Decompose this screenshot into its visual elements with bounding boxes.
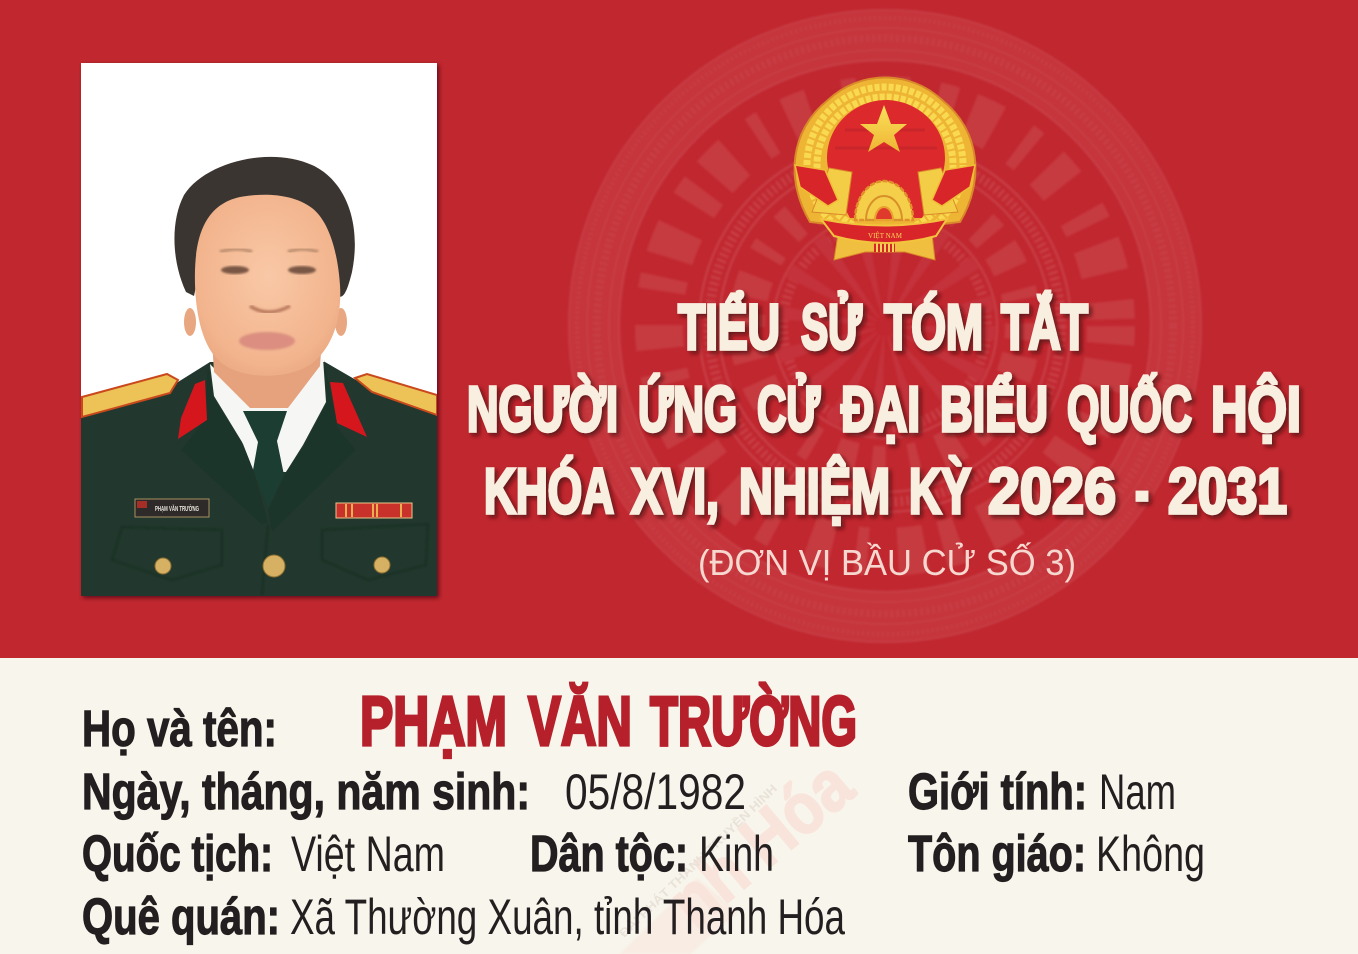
hair [174,157,355,297]
ears [184,308,196,336]
faint station watermark: nh Hóa [654,744,868,942]
head [174,157,355,376]
title line 1: TÓM [884,291,983,363]
candidate name: TRƯỜNG [650,682,857,760]
bronze drum watermark [569,10,1201,642]
field: full name [82,682,857,760]
field: hometown: Quê quán: [82,888,280,945]
title line 1: TIỂU [678,290,780,363]
right red ribbon [932,165,975,206]
title line 2: NGƯỜI [467,373,618,445]
title line 3: NHIỆM [739,454,890,527]
name tag: PHẠM VĂN TRƯỜNG [155,504,199,513]
inner red field [827,100,945,218]
national emblem [795,78,975,260]
pockets [112,524,428,596]
right collar tab [330,382,367,437]
right epaulette [355,374,437,415]
title line 3: KỲ [909,455,971,527]
field: gender: Nam [1099,764,1176,820]
left sheaf [812,168,852,215]
cogwheel [855,181,913,220]
white shirt collar [210,358,326,472]
neck [212,354,321,408]
gold buttons [155,555,390,577]
title [467,290,1301,527]
title line 1: SỬ [801,290,863,363]
left red ribbon [795,165,838,206]
left lapel [240,440,254,472]
face [195,195,340,376]
nose [250,306,290,312]
left epaulette [82,374,178,417]
name tag [135,499,209,517]
eyes [221,266,249,274]
necktie [243,411,287,472]
title line 2: QUỐC [1067,373,1192,445]
mouth [239,332,295,350]
field: date of birth: Ngày, tháng, năm sinh: [82,763,530,820]
title line 3: - [1135,455,1149,527]
faint station watermark [616,744,868,954]
field: hometown: Xã Thường Xuân, tỉnh Thanh Hóa [290,889,845,945]
ribbon bar [336,503,412,518]
portrait photo [81,63,437,596]
grain texture [807,87,963,243]
field: nationality: Quốc tịch: [82,825,273,882]
red header background [0,0,1358,658]
candidate name: VĂN [528,682,632,760]
uniform jacket [81,362,437,596]
title line 2: ĐẠI [841,373,920,445]
title line 3: 2031 [1168,455,1287,527]
subtitle: (ĐƠN VỊ BẦU CỬ SỐ 3) [698,541,1076,583]
gold star [860,105,907,152]
eyebrows [220,249,318,252]
field: religion: Không [1096,826,1205,882]
title line 3: KHÓA [484,455,614,527]
candidate name: PHẠM [360,682,507,760]
field: hometown [82,888,845,945]
lower red field detail [835,130,937,148]
title line 3 [484,454,1287,527]
wheat horseshoe [795,78,975,226]
field: ethnicity: Kinh [699,826,774,882]
title line 2: BIỂU [940,372,1048,445]
title line 3: 2026 [988,455,1116,527]
candidate name [360,682,857,760]
bottom scroll [821,219,947,243]
title line 1: TẮT [1001,290,1088,363]
title line 2: CỬ [757,372,821,445]
title line 2: ỨNG [638,373,737,445]
faint station watermark: ĐÀI PHÁT THANH TRUYỀN HÌNH [616,781,780,940]
right sheaf [918,168,958,215]
field: religion: Tôn giáo: [908,825,1086,882]
field: gender: Giới tính: [908,763,1087,820]
field: full name: Họ và tên: [82,700,277,757]
right lapel [286,360,324,472]
bottom scroll: VIỆT NAM [868,232,903,240]
title line 3: XVI, [631,455,719,527]
title line 1 [678,290,1088,363]
title line 2 [467,372,1301,445]
field: nationality [82,825,445,882]
cream lower panel background [0,658,1358,954]
emblem base [834,234,935,260]
field: nationality: Việt Nam [291,826,445,882]
field: date of birth: 05/8/1982 [565,764,746,820]
title line 2: HỘI [1211,372,1301,445]
left collar tab [178,380,207,439]
field: ethnicity: Dân tộc: [530,825,688,882]
